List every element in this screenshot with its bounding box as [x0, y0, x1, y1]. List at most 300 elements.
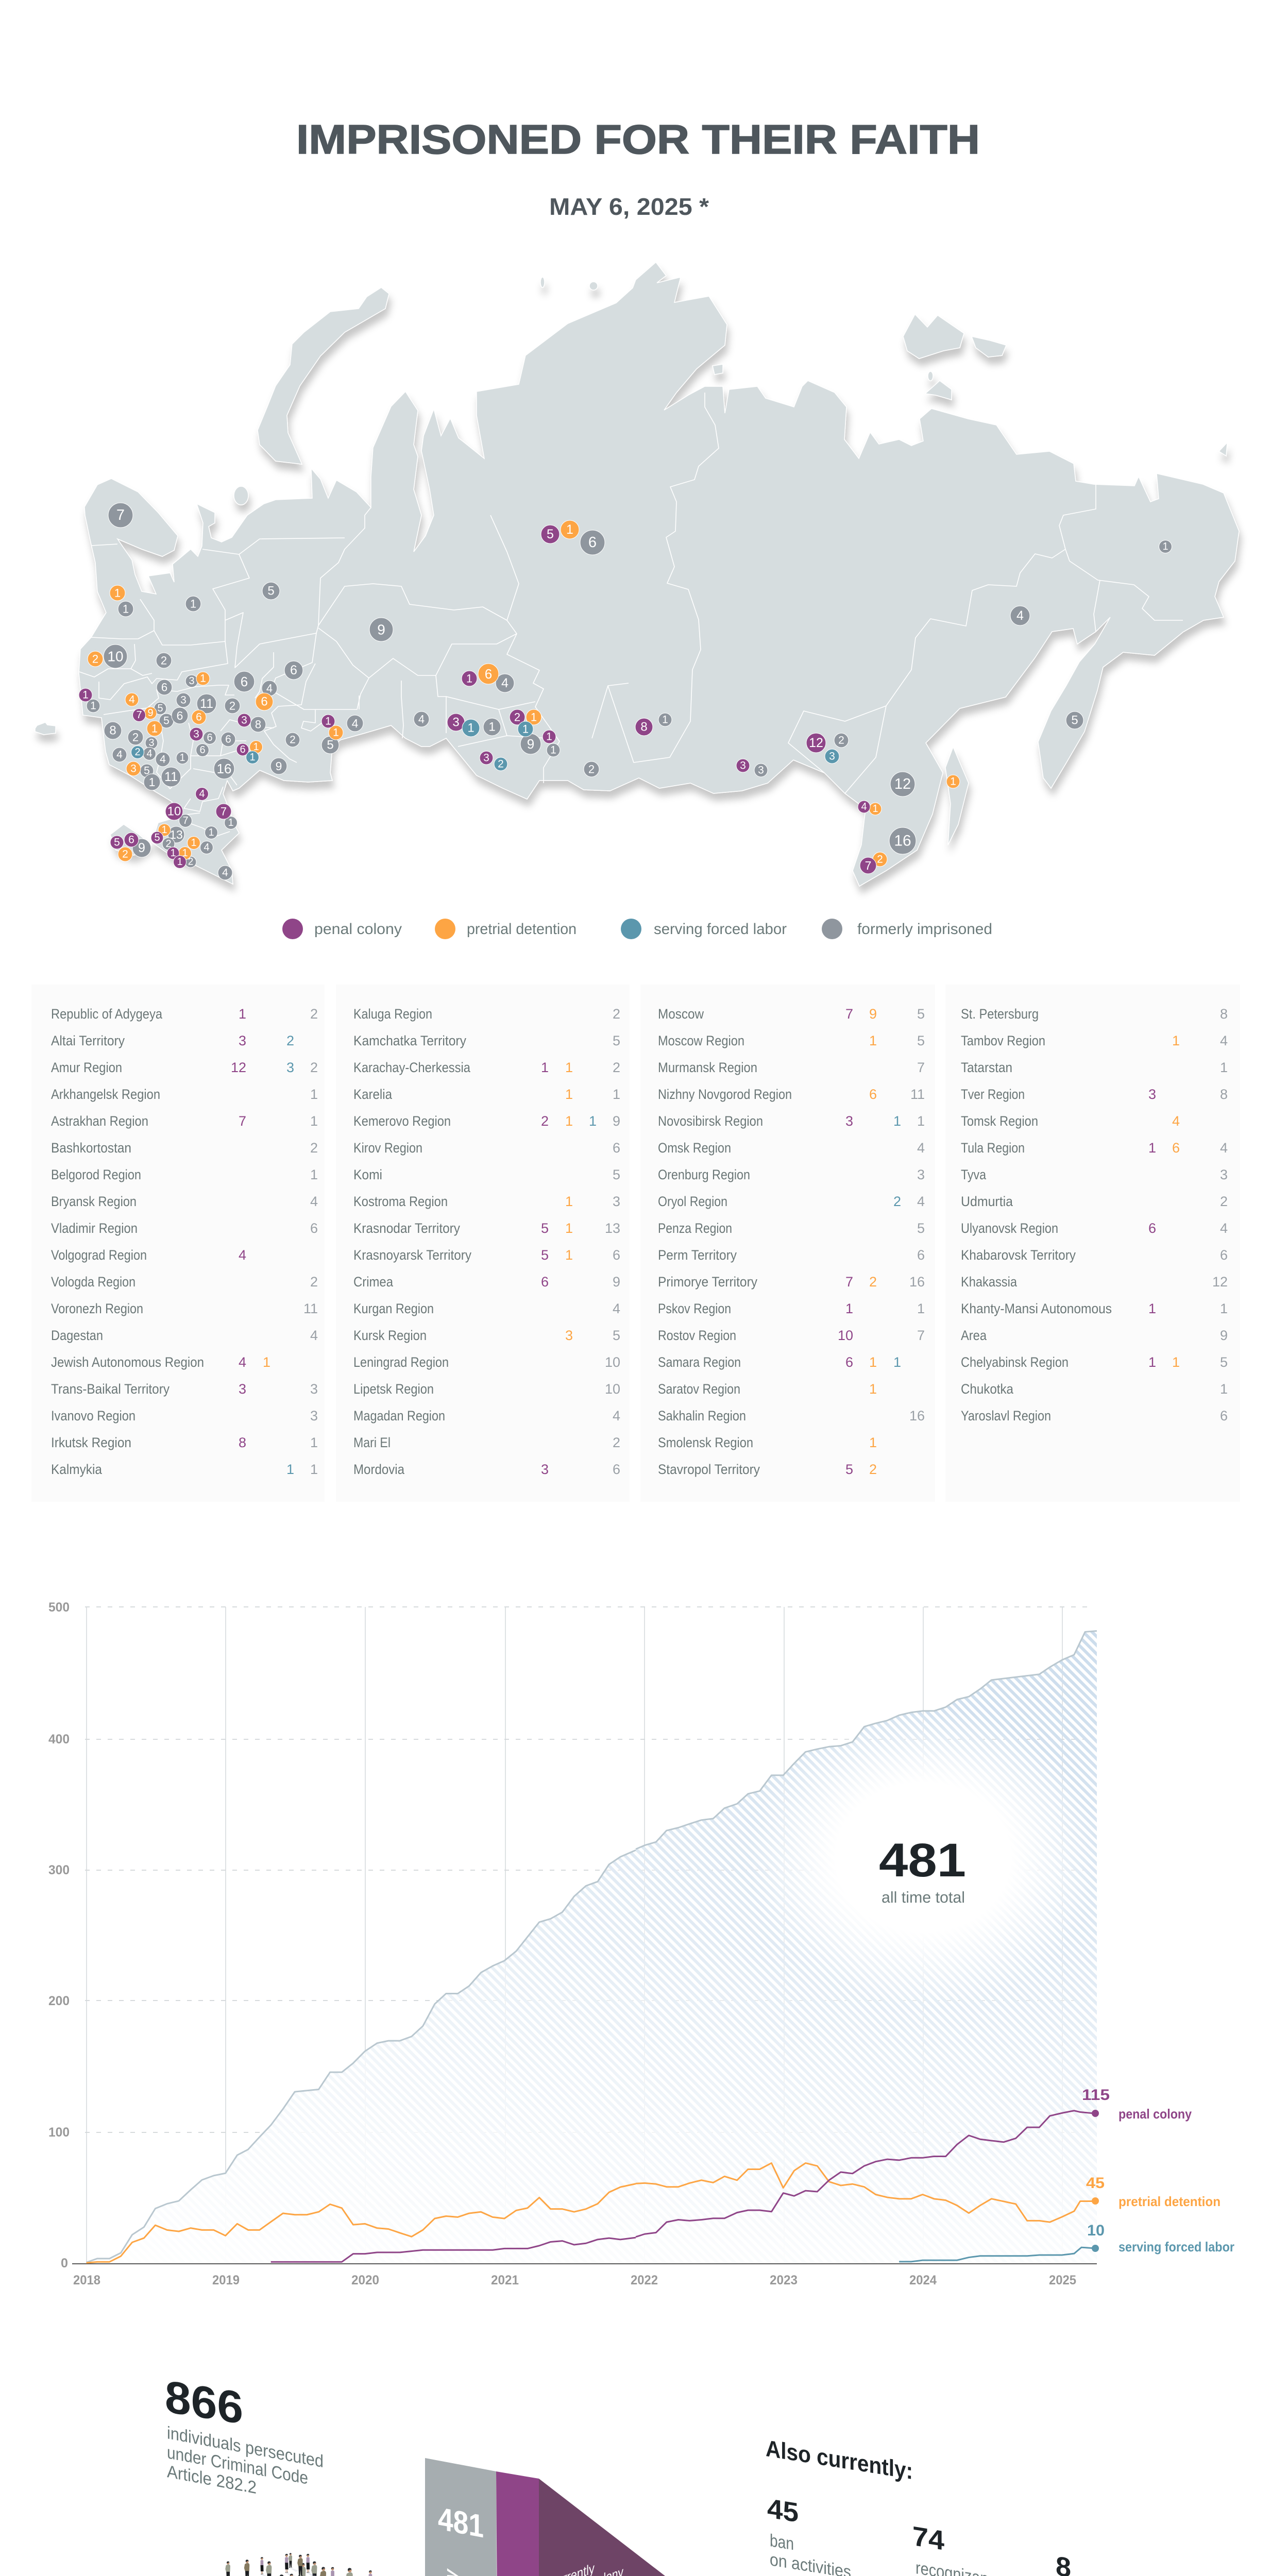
all time total: all time total [882, 1888, 965, 1906]
table panel 4: 6 [1148, 1221, 1156, 1236]
chart axes: 2021 [491, 2273, 519, 2287]
table panel 1: Vologda Region [51, 1274, 135, 1290]
table panel 2: 2 [613, 1006, 620, 1022]
table panel 2: 6 [613, 1247, 620, 1263]
map badges: 6 [485, 666, 492, 682]
table panel 3: 1 [845, 1301, 853, 1316]
map badges: 3 [758, 765, 764, 776]
map badges: 5 [157, 703, 163, 714]
map badges: 6 [128, 834, 134, 846]
table panel 2 [336, 985, 630, 1502]
table panel 4: Khanty-Mansi Autonomous [961, 1301, 1112, 1316]
map badges: 1 [253, 741, 259, 753]
table panel 3: Primorye Territory [658, 1274, 757, 1290]
table panel 3: Penza Region [658, 1221, 732, 1236]
chart axes: 2024 [909, 2273, 937, 2287]
map badges: 3 [452, 715, 460, 730]
table panel 2: Krasnodar Territory [353, 1221, 460, 1236]
map badges: 5 [1071, 713, 1078, 727]
map badges: 9 [138, 841, 145, 855]
table panel 2: 1 [565, 1113, 573, 1129]
table panel 4: 1 [1172, 1354, 1180, 1370]
map badges: 2 [134, 747, 141, 758]
map badges: 4 [199, 788, 205, 800]
also currently block: 74 [912, 2521, 944, 2556]
table panel 1: Jewish Autonomous Region [51, 1354, 204, 1370]
table panel 4: St. Petersburg [961, 1006, 1039, 1022]
table panel 4: 2 [1220, 1194, 1228, 1209]
map badges: 8 [640, 720, 648, 734]
chart axes: 100 [48, 2125, 70, 2140]
map badges: 2 [877, 853, 883, 866]
table panel 4: Chelyabinsk Region [961, 1354, 1069, 1370]
line end dots and labels: penal colony [1119, 2106, 1192, 2122]
map badges: 2 [588, 762, 595, 776]
table panel 3 [640, 985, 935, 1502]
table panel 1: 2 [286, 1033, 294, 1048]
table panel 4: 3 [1148, 1087, 1156, 1102]
table panel 1: 1 [286, 1462, 294, 1477]
table panel 4: 4 [1220, 1033, 1228, 1048]
table panel 2: 1 [565, 1087, 573, 1102]
table panel 2: Mordovia [353, 1462, 405, 1477]
map badges: 4 [1016, 608, 1024, 623]
table panel 3: 7 [917, 1328, 925, 1343]
line end dots and labels: 10 [1087, 2222, 1105, 2239]
map badges: 1 [208, 827, 214, 838]
table panel 1: 4 [310, 1328, 318, 1343]
map badges: 1 [467, 721, 474, 735]
table panel 1: 1 [310, 1087, 318, 1102]
table panel 2: Kemerovo Region [353, 1113, 451, 1129]
table panel 1: Voronezh Region [51, 1301, 143, 1316]
penal colony line [271, 2111, 1096, 2262]
penal colony block [496, 2471, 665, 2576]
map badges: 1 [546, 731, 552, 743]
table panel 1: 1 [239, 1006, 246, 1022]
map badges: 8 [255, 718, 261, 731]
map legend: penal colony [314, 921, 402, 938]
table panel 3: 4 [917, 1194, 925, 1209]
map badges: 10 [167, 805, 181, 818]
table panel 4: 1 [1220, 1060, 1228, 1075]
table panel 1: 3 [239, 1033, 246, 1048]
table panel 4: Yaroslavl Region [961, 1408, 1051, 1423]
chart axes [48, 1600, 1076, 2287]
map badges: 4 [352, 717, 359, 730]
map badges: 5 [163, 715, 170, 726]
table panel 4 [945, 985, 1240, 1502]
table panel 3: 16 [909, 1274, 925, 1290]
table panel 1: 3 [310, 1408, 318, 1423]
table panel 3: 10 [838, 1328, 853, 1343]
table panel 3: Smolensk Region [658, 1435, 753, 1450]
all time total: 481 [879, 1834, 966, 1887]
map badges: 1 [531, 711, 537, 723]
map badges: 1 [90, 700, 96, 712]
date subtitle: MAY 6, 2025 * [549, 193, 709, 220]
table panel 3: 4 [917, 1140, 925, 1156]
map badges: 1 [333, 726, 339, 739]
map badges: 3 [241, 714, 247, 726]
table panel 1: Irkutsk Region [51, 1435, 131, 1450]
map badges: 3 [740, 759, 746, 772]
table panel 2: 6 [541, 1274, 549, 1290]
table panel 3: Pskov Region [658, 1301, 731, 1316]
map badges: 1 [466, 672, 472, 685]
table panel 3: Novosibirsk Region [658, 1113, 763, 1129]
table panel 1: Volgograd Region [51, 1247, 147, 1263]
also currently block: ban [770, 2531, 794, 2554]
table panel 4: Area [961, 1328, 987, 1343]
table panel 3: 5 [917, 1033, 925, 1048]
table panel 3: 7 [845, 1274, 853, 1290]
map badges: 1 [1162, 541, 1168, 552]
map badges: 1 [182, 848, 188, 859]
also currently block: Also currently: [766, 2435, 913, 2484]
table panel 4: 1 [1148, 1354, 1156, 1370]
table panel 1: Altai Territory [51, 1033, 125, 1048]
map badges: 5 [144, 765, 150, 777]
map legend: formerly imprisoned [857, 921, 992, 938]
table panel 3: Omsk Region [658, 1140, 731, 1156]
map badges: 6 [207, 732, 213, 743]
table panel 3: Oryol Region [658, 1194, 727, 1209]
map badges: 9 [377, 621, 385, 638]
map badges: 5 [267, 584, 275, 598]
map badges: 2 [290, 734, 296, 746]
table panel 1: 2 [310, 1274, 318, 1290]
table panel 3: 6 [917, 1247, 925, 1263]
map badges: 3 [130, 762, 137, 775]
table panel 2: 5 [613, 1033, 620, 1048]
table panel 3: 5 [917, 1006, 925, 1022]
map badges: 2 [514, 711, 520, 723]
map badges: 1 [114, 586, 121, 600]
chart axes: 2022 [631, 2273, 658, 2287]
table panel 2: 9 [613, 1113, 620, 1129]
map badges: 1 [488, 720, 496, 734]
map badges: 1 [190, 598, 196, 610]
title: IMPRISONED FOR THEIR FAITH [296, 116, 980, 162]
map badges: 4 [266, 682, 273, 694]
all time total [879, 1834, 966, 1906]
table panel 2: Krasnoyarsk Territory [353, 1247, 471, 1263]
map badges: 6 [225, 734, 231, 745]
table panel 2: 10 [605, 1354, 620, 1370]
map badges: 4 [129, 693, 135, 706]
map badges: 6 [261, 694, 268, 709]
table panel 4: 6 [1220, 1408, 1228, 1423]
map badges: 1 [151, 722, 158, 735]
table panel 3: 1 [917, 1113, 925, 1129]
map badges: 16 [217, 761, 231, 776]
map badges: 2 [122, 848, 128, 860]
table panel 1: 2 [310, 1006, 318, 1022]
map badges: 1 [550, 744, 556, 756]
table panel 1: 1 [310, 1167, 318, 1182]
table panel 2: 6 [613, 1140, 620, 1156]
table panel 1: 12 [231, 1060, 246, 1075]
table panel 1 [31, 985, 325, 1502]
chart axes: 2023 [770, 2273, 798, 2287]
hatched total area [82, 1597, 1103, 2267]
map badges: 6 [241, 674, 248, 689]
table panel 2: Kaluga Region [353, 1006, 432, 1022]
table panel 3: 5 [845, 1462, 853, 1477]
table panel 2: Kostroma Region [353, 1194, 448, 1209]
map badges: 2 [161, 654, 167, 667]
map badges: 1 [191, 837, 197, 849]
also currently block [766, 2435, 1141, 2576]
table panel 1: 1 [310, 1435, 318, 1450]
table panel 2: Leningrad Region [353, 1354, 449, 1370]
table panel 3: 2 [893, 1194, 901, 1209]
table panel 4: Khakassia [961, 1274, 1018, 1290]
table panel 2: 1 [541, 1060, 549, 1075]
map legend: serving forced labor [654, 921, 787, 938]
table panel 3: Orenburg Region [658, 1167, 750, 1182]
map badges: 2 [92, 652, 98, 666]
table panel 2: Kamchatka Territory [353, 1033, 466, 1048]
map badges: 2 [132, 731, 139, 744]
table panel 3: 3 [845, 1113, 853, 1129]
table panel 3: 3 [917, 1167, 925, 1182]
chart axes: 300 [48, 1863, 70, 1877]
table panel 4: 6 [1220, 1247, 1228, 1263]
map badges: 7 [221, 805, 227, 818]
facade grey: previously or currently incarcerated: 481 [438, 2500, 484, 2545]
table panel 2: 3 [565, 1328, 573, 1343]
map badges: 4 [501, 676, 509, 690]
map badges: 11 [164, 770, 178, 784]
table panel 4: 6 [1172, 1140, 1180, 1156]
table panel 2: 10 [605, 1381, 620, 1397]
chart axes: 2019 [212, 2273, 240, 2287]
map badges: 12 [809, 736, 823, 750]
table panel 2: Karelia [353, 1087, 393, 1102]
map badges: 4 [222, 867, 228, 879]
chart axes: 2025 [1049, 2273, 1076, 2287]
table panel 4: Tambov Region [961, 1033, 1045, 1048]
table panel 1: 4 [239, 1247, 246, 1263]
table panel 3: Perm Territory [658, 1247, 737, 1263]
table panel 1: 2 [310, 1060, 318, 1075]
table panel 1: 8 [239, 1435, 246, 1450]
table panel 1: 11 [303, 1301, 318, 1316]
facade grey: previously or currently incarcerated [425, 2458, 539, 2576]
table panel 4: 1 [1148, 1301, 1156, 1316]
table panel 4: 8 [1220, 1087, 1228, 1102]
crowd illustration [101, 2538, 471, 2576]
map badges: 1 [123, 603, 129, 615]
table panel 3: Murmansk Region [658, 1060, 757, 1075]
stat: 866 individuals: 866 [165, 2370, 243, 2434]
table panel 3: Moscow [658, 1006, 704, 1022]
table panel 1: 1 [310, 1462, 318, 1477]
chart axes: 0 [61, 2256, 68, 2270]
table panel 4: 3 [1220, 1167, 1228, 1182]
table panel 4: 9 [1220, 1328, 1228, 1343]
table panel 4: Chukotka [961, 1381, 1014, 1397]
table panel 2: 9 [613, 1274, 620, 1290]
table panel 2: 1 [613, 1087, 620, 1102]
table panel 3: 2 [869, 1274, 877, 1290]
map badges: 1 [249, 752, 256, 763]
line end dots and labels: serving forced labor [1119, 2239, 1234, 2255]
table panel 3: 1 [893, 1354, 901, 1370]
chart axes: 200 [48, 1994, 70, 2008]
map legend: pretrial detention [467, 921, 577, 938]
map badges: 1 [179, 752, 185, 764]
table panel 1: Bashkortostan [51, 1140, 131, 1156]
map badges: 6 [290, 663, 297, 677]
map badges [79, 503, 1172, 880]
map badges: 1 [325, 715, 331, 727]
map badges: 1 [177, 856, 183, 868]
map badges: 16 [894, 833, 911, 849]
table panel 3: 7 [917, 1060, 925, 1075]
table panel 3: 1 [869, 1381, 877, 1397]
table panel 4: 1 [1220, 1381, 1228, 1397]
table panel 3: 6 [845, 1354, 853, 1370]
table panel 2: Kurgan Region [353, 1301, 434, 1316]
table panel 4: Tomsk Region [961, 1113, 1038, 1129]
table panel 2: 3 [541, 1462, 549, 1477]
table panel 3: Samara Region [658, 1354, 741, 1370]
table panel 3: 11 [910, 1087, 925, 1102]
map badges: 4 [418, 713, 425, 725]
table panel 3: 9 [869, 1006, 877, 1022]
table panel 2: Komi [353, 1167, 382, 1182]
map badges: 10 [107, 648, 124, 665]
table panel 1: 4 [239, 1354, 246, 1370]
map badges: 9 [147, 707, 154, 719]
map badges: 1 [170, 848, 176, 859]
map badges: 4 [204, 842, 210, 853]
table panel 2: 1 [565, 1247, 573, 1263]
table panel 2: 1 [565, 1221, 573, 1236]
table panel 2: 3 [613, 1194, 620, 1209]
table panel 3: Moscow Region [658, 1033, 744, 1048]
table panel 3: 1 [869, 1033, 877, 1048]
table panel 4: 5 [1220, 1354, 1228, 1370]
table panel 2: 1 [565, 1060, 573, 1075]
table panel 2: Crimea [353, 1274, 394, 1290]
table panel 2: 2 [613, 1060, 620, 1075]
table panel 2: 4 [613, 1301, 620, 1316]
table panel 4: Tatarstan [961, 1060, 1012, 1075]
map badges: 3 [148, 737, 155, 749]
table panel 1: Vladimir Region [51, 1221, 138, 1236]
map badges: 12 [894, 776, 911, 792]
table panel 4: 1 [1148, 1140, 1156, 1156]
table panel 1: 7 [239, 1113, 246, 1129]
map badges: 11 [200, 697, 213, 711]
table panel 3: 5 [917, 1221, 925, 1236]
line end dots and labels: 45 [1086, 2175, 1105, 2192]
map badges: 2 [165, 838, 172, 850]
map badges: 1 [228, 817, 234, 828]
table panel 4: 1 [1220, 1301, 1228, 1316]
table panel 4: Tver Region [961, 1087, 1025, 1102]
table panel 2: 1 [565, 1194, 573, 1209]
map badges: 2 [188, 856, 193, 868]
map badges: 13 [170, 828, 183, 841]
table panel 2: 5 [613, 1167, 620, 1182]
map badges: 1 [522, 722, 529, 736]
map badges: 1 [82, 689, 89, 701]
table panel 4: 4 [1172, 1113, 1180, 1129]
table panel 2: Mari El [353, 1435, 391, 1450]
line end dots and labels: 115 [1082, 2087, 1110, 2104]
table panel 3: 16 [909, 1408, 925, 1423]
table panel 3: Rostov Region [658, 1328, 736, 1343]
table panel 3: Sakhalin Region [658, 1408, 746, 1423]
map badges: 3 [483, 752, 489, 764]
table panel 1: Kalmykia [51, 1462, 103, 1477]
chart axes: 2020 [351, 2273, 379, 2287]
table panel 3: 1 [869, 1354, 877, 1370]
table panel 2: Magadan Region [353, 1408, 445, 1423]
map badges: 7 [182, 815, 189, 826]
table panel 1: 6 [310, 1221, 318, 1236]
table panel 2: 6 [613, 1462, 620, 1477]
table panel 1: Republic of Adygeya [51, 1006, 163, 1022]
table panel 1: Belgorod Region [51, 1167, 141, 1182]
table panel 2: Kursk Region [353, 1328, 427, 1343]
map badges: 1 [149, 775, 155, 789]
map badges: 2 [838, 735, 844, 746]
map badges: 1 [200, 673, 206, 684]
line chart [48, 1597, 1234, 2287]
map badges: 5 [327, 738, 334, 752]
table panel 2: 5 [541, 1221, 549, 1236]
table panel 3: Saratov Region [658, 1381, 740, 1397]
table panel 1: Trans-Baikal Territory [51, 1381, 170, 1397]
map badges: 8 [109, 723, 116, 738]
table panel 3: Nizhny Novgorod Region [658, 1087, 792, 1102]
map badges: 1 [566, 522, 573, 537]
table panel 3: Stavropol Territory [658, 1462, 760, 1477]
table panel 2: Lipetsk Region [353, 1381, 434, 1397]
table panel 1: 3 [286, 1060, 294, 1075]
table panel 2: 2 [613, 1435, 620, 1450]
map badges: 5 [547, 527, 554, 541]
map badges: 4 [116, 749, 123, 760]
map badges: 3 [189, 675, 195, 687]
map badges: 6 [199, 744, 206, 756]
map badges: 3 [829, 750, 835, 762]
table panel 4: 1 [1172, 1033, 1180, 1048]
chart axes: 500 [48, 1600, 70, 1615]
chart axes: 400 [48, 1732, 70, 1747]
table panel 1: 2 [310, 1140, 318, 1156]
stat: 866 individuals: under Criminal Code [167, 2443, 308, 2488]
table panel 2: 5 [541, 1247, 549, 1263]
table panel 2: 2 [541, 1113, 549, 1129]
map badges: 1 [662, 714, 668, 725]
pretrial detention line [87, 2163, 1096, 2263]
table panel 4: 12 [1212, 1274, 1228, 1290]
table panel 1: 1 [310, 1113, 318, 1129]
map badges: 4 [861, 801, 867, 812]
map badges: 6 [161, 681, 167, 693]
map badges: 6 [588, 534, 597, 551]
map badges: 6 [196, 711, 202, 723]
map badges: 4 [160, 753, 166, 766]
table panel 4: 4 [1220, 1221, 1228, 1236]
